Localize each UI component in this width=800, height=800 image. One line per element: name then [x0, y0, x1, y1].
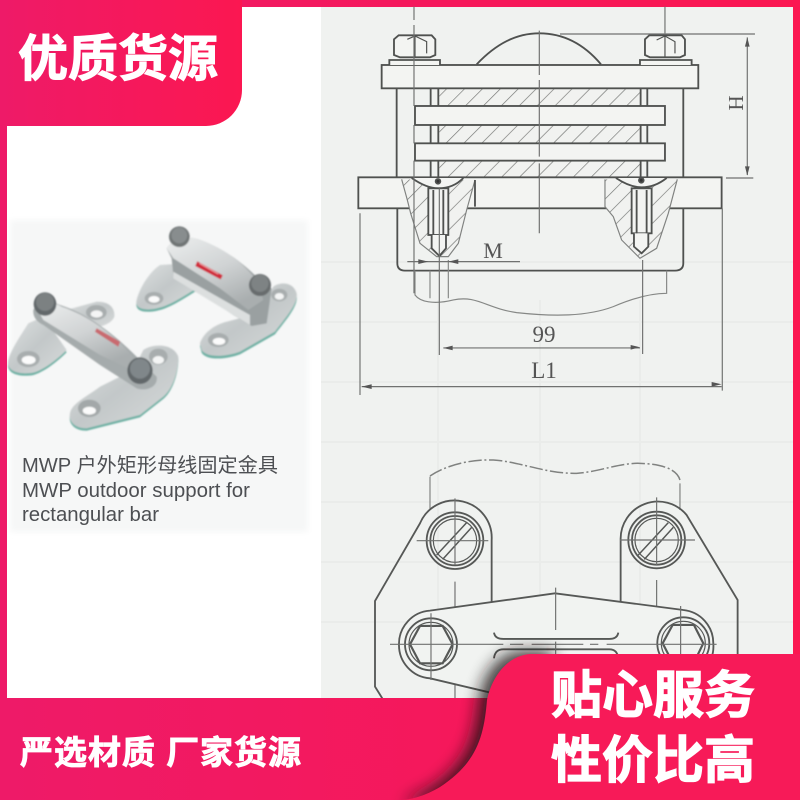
- slogan: value for money: 性价比高: [551, 732, 755, 789]
- hatched blocks: [439, 88, 640, 177]
- studs and side walls: [397, 88, 683, 177]
- photo caption: MWP outdoor support for: [22, 480, 250, 502]
- extension lines: [360, 34, 755, 395]
- dimension label: H: H: [724, 95, 748, 111]
- round head screws: [417, 498, 488, 700]
- panel: product photo: [8, 220, 308, 532]
- bottom-left slogan: 严选材质 厂家货源: [20, 734, 301, 771]
- dimension label: L1: L1: [531, 358, 557, 383]
- photo caption: rectangular bar: [22, 504, 159, 526]
- bracket outline: [375, 501, 492, 700]
- ghost table print-through: [321, 262, 793, 640]
- centre lines: [360, 7, 755, 395]
- phantom outline: [430, 460, 680, 480]
- fold shadow: [402, 651, 552, 800]
- clamp slot: [494, 633, 618, 658]
- front fitting: [8, 319, 67, 376]
- centre lines: [390, 643, 717, 646]
- top plate: [382, 65, 698, 88]
- dimension label: 99: 99: [532, 322, 556, 347]
- side view technical drawing: [358, 7, 755, 395]
- photo: metal fittings: [8, 226, 297, 431]
- dome: [477, 33, 601, 64]
- panel: bottom banner: [381, 640, 793, 800]
- left frame edge: [0, 0, 7, 800]
- hex bolts: [405, 618, 457, 670]
- nuts: [389, 35, 692, 65]
- back fitting: [136, 266, 197, 312]
- bars: [415, 106, 665, 125]
- threaded hole right: [605, 179, 677, 258]
- photo caption: MWP 户外矩形母线固定金具: [22, 454, 278, 477]
- arrows: [362, 37, 750, 389]
- red label: [195, 261, 223, 279]
- base plate: [358, 177, 722, 208]
- panel: technical drawing background: [321, 7, 793, 698]
- dimension label: M: M: [483, 238, 503, 263]
- slogan: caring service: 贴心服务: [551, 667, 755, 724]
- bar break: [415, 260, 667, 315]
- lower body: [397, 208, 683, 271]
- photo caption: [22, 454, 278, 526]
- plan view technical drawing: [375, 460, 738, 700]
- badge: top-left: [0, 0, 242, 126]
- right ribbon: [400, 654, 800, 800]
- threaded hole left: [402, 179, 475, 257]
- clamp outline: [399, 593, 713, 693]
- badge title: 优质货源: [18, 31, 218, 87]
